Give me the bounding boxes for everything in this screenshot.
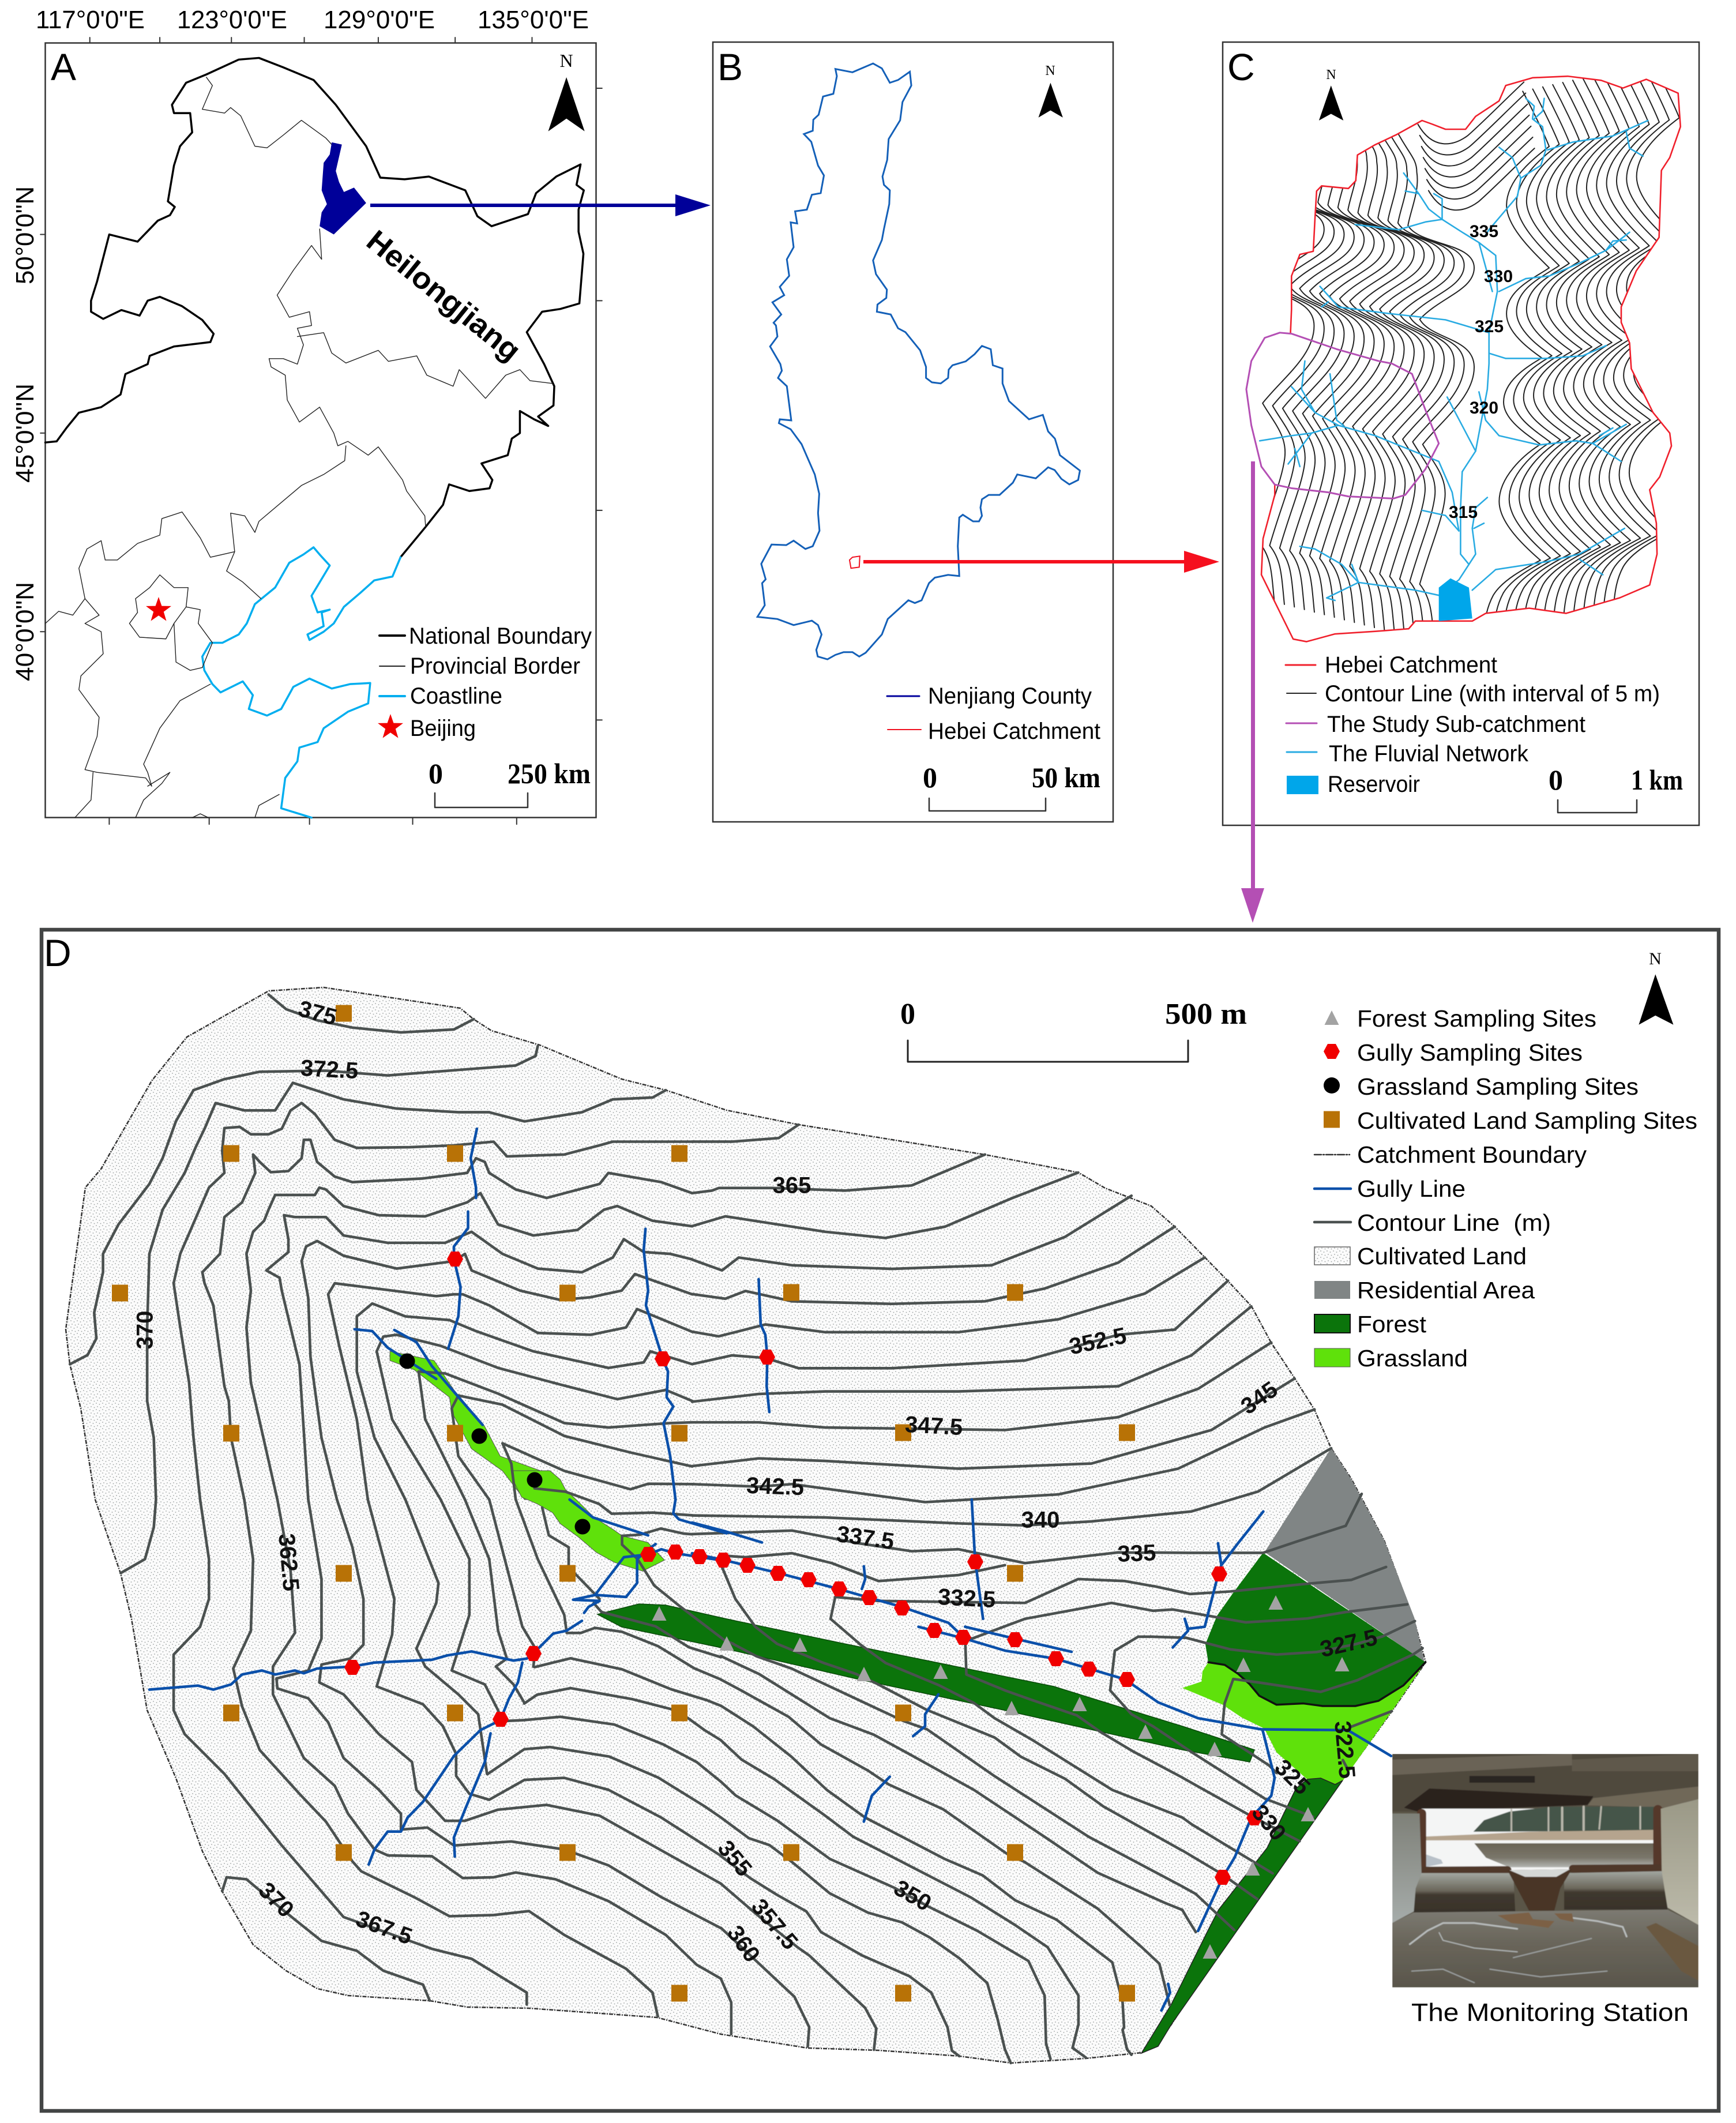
legend D	[1314, 1005, 1697, 1372]
contour labels C: 330	[1484, 267, 1513, 286]
contour labels D: 375	[296, 996, 340, 1031]
legend D: Catchment Boundary	[1357, 1141, 1587, 1168]
legend C: Contour Line (with interval of 5 m)	[1325, 681, 1660, 707]
legend C: Hebei Catchment	[1325, 652, 1497, 678]
photo window frame	[1417, 1813, 1426, 1870]
contour labels D: 360	[722, 1921, 765, 1967]
legend A: National Boundary	[409, 623, 592, 649]
Hebei Catchment location	[850, 556, 860, 568]
contour labels D: 332.5	[937, 1584, 996, 1613]
photo side walls	[1392, 1813, 1422, 1923]
Hebei Catchment boundary	[1261, 76, 1681, 642]
contour labels D: 352.5	[1067, 1323, 1129, 1360]
contour labels C: 335	[1470, 222, 1498, 241]
Nenjiang County outline	[757, 63, 1080, 659]
scale bar A: 0	[429, 757, 443, 790]
contour lines upper right	[692, 1125, 1314, 1502]
cultivated land catchment area	[66, 987, 1426, 2063]
photo water floor	[1392, 1910, 1699, 1987]
contour labels D: 357.5	[746, 1894, 803, 1955]
legend C: The Fluvial Network	[1329, 741, 1529, 766]
legend D: Forest	[1357, 1311, 1427, 1337]
scale bar C: 0	[1549, 764, 1563, 796]
legend D: Grassland Sampling Sites	[1357, 1073, 1639, 1100]
contour labels D: 370	[254, 1877, 299, 1922]
contour lines upper left	[70, 994, 692, 1500]
contour lines lower left	[121, 1500, 721, 2016]
legend A: Coastline	[410, 683, 502, 709]
legend C	[1286, 652, 1660, 797]
scale bar D	[900, 998, 1247, 1062]
legend D: Forest Sampling Sites	[1357, 1005, 1596, 1032]
catchment map C	[1233, 63, 1681, 643]
panel letter C: C	[1227, 46, 1255, 88]
contour labels D: 327.5	[1318, 1625, 1380, 1662]
gully lines lower right	[692, 1500, 1391, 2011]
longitude and latitude tick marks	[40, 37, 602, 824]
coastline	[202, 547, 400, 818]
forest edge strip	[1141, 1778, 1343, 2053]
scale bar B: 0	[923, 761, 937, 794]
grassland sampling sites	[399, 1353, 591, 1534]
contour labels C	[1449, 222, 1513, 522]
legend D: Cultivated Land Sampling Sites	[1357, 1107, 1697, 1134]
cultivated land sampling sites	[112, 1005, 1135, 2001]
contour lines far right	[1153, 1494, 1423, 1932]
legend D: Contour Line (m)	[1357, 1209, 1551, 1236]
panel letter B: B	[717, 46, 743, 88]
contour lines lower centre	[721, 1644, 1182, 2063]
photo opening	[1422, 1809, 1658, 1870]
study sub-catchment boundary	[1246, 333, 1439, 498]
gully sampling sites	[344, 1252, 1262, 1885]
longitude labels: 135°0'0"E	[478, 6, 589, 34]
fluvial network	[1260, 99, 1648, 600]
arrow: B to C	[863, 551, 1219, 573]
legend B: Hebei Catchment	[928, 719, 1100, 744]
gully lines upper	[355, 1129, 675, 1500]
legend A: Beijing	[410, 716, 476, 741]
longitude labels	[36, 6, 589, 34]
contour labels D: 362.5	[273, 1532, 304, 1592]
scale bar A: 250 km	[508, 757, 591, 790]
contour labels D: 365	[773, 1173, 811, 1198]
latitude labels: 40°0'0"N	[11, 582, 39, 681]
contour labels D: 370	[133, 1311, 158, 1349]
residential area	[1265, 1448, 1425, 1662]
Nenjiang County highlight	[320, 142, 366, 235]
legend B	[887, 683, 1100, 744]
provincial borders	[46, 77, 553, 818]
contour labels D: 325	[1270, 1754, 1315, 1799]
scale bar B	[923, 761, 1100, 811]
land cover lower right	[1182, 1553, 1426, 1784]
north arrow C: N	[1326, 67, 1336, 82]
north arrow B	[1039, 63, 1063, 118]
legend A	[378, 623, 592, 741]
gully line upper right	[758, 1279, 769, 1412]
panel C: Hebei Catchment	[1223, 42, 1699, 825]
legend C: Reservoir	[1328, 772, 1420, 797]
map A linework	[46, 58, 584, 818]
forest block	[1205, 1553, 1426, 1706]
latitude labels	[11, 186, 39, 681]
forest strip	[598, 1604, 1254, 1762]
contour labels D: 330	[1247, 1800, 1291, 1846]
north arrow A	[548, 50, 585, 131]
contour lines C	[1233, 63, 1679, 643]
contour labels D: 340	[1021, 1508, 1059, 1533]
north arrow A: N	[559, 50, 573, 71]
latitude labels: 50°0'0"N	[11, 186, 39, 284]
label: Heilongjiang: Heilongjiang	[360, 224, 527, 368]
scale bar C: 1 km	[1631, 764, 1683, 796]
contour labels C: 325	[1475, 317, 1504, 336]
contour labels C: 320	[1470, 399, 1498, 418]
contour labels D: 347.5	[904, 1412, 963, 1440]
contour labels D: 355	[713, 1836, 757, 1881]
scale bar B: 50 km	[1032, 761, 1100, 794]
panel A: regional map	[11, 6, 602, 824]
photo: the monitoring station	[1392, 1754, 1699, 1987]
contour labels D: 335	[1117, 1540, 1156, 1567]
grassland block	[1182, 1662, 1426, 1784]
photo ceiling	[1392, 1754, 1699, 1812]
north arrow D: N	[1649, 949, 1662, 968]
Beijing star	[146, 597, 171, 621]
panel letter D: D	[44, 931, 72, 974]
reservoir	[1439, 578, 1472, 621]
panel B frame	[713, 42, 1113, 822]
contour lines middle right	[692, 1448, 1331, 1727]
contour labels D: 372.5	[300, 1055, 359, 1084]
north arrow B: N	[1045, 63, 1055, 78]
contour labels C: 315	[1449, 503, 1478, 522]
national boundary	[46, 58, 584, 557]
contour labels D: 342.5	[746, 1473, 805, 1500]
forest sampling sites	[652, 1595, 1350, 1959]
contour labels D	[133, 996, 1380, 1967]
contour labels D: 322.5	[1329, 1720, 1360, 1780]
legend D: Grassland	[1357, 1345, 1468, 1372]
panel C frame	[1223, 42, 1699, 825]
contour lines centre	[487, 1489, 733, 1817]
longitude labels: 129°0'0"E	[324, 6, 435, 34]
scale bar A	[429, 757, 591, 807]
photo weir	[1414, 1873, 1515, 1912]
panel A frame	[45, 43, 596, 818]
arrow: C to D	[1241, 461, 1264, 923]
longitude labels: 117°0'0"E	[36, 6, 145, 34]
latitude labels: 45°0'0"N	[11, 384, 39, 483]
legend D: Gully Sampling Sites	[1357, 1039, 1583, 1066]
contour labels D: 350	[889, 1875, 935, 1917]
contour labels D: 345	[1237, 1377, 1283, 1419]
arrow: A to B	[370, 194, 711, 216]
scale bar C	[1549, 764, 1683, 813]
legend D: Residential Area	[1357, 1277, 1535, 1303]
legend D: Cultivated Land	[1357, 1243, 1527, 1269]
forest boundary line	[1208, 1662, 1426, 1706]
legend A: Provincial Border	[410, 653, 580, 679]
north arrow C	[1319, 67, 1343, 121]
panel letter A: A	[51, 46, 76, 88]
contour labels D: 337.5	[835, 1521, 896, 1554]
legend D: Gully Line	[1357, 1175, 1466, 1202]
panel D frame	[42, 930, 1719, 2111]
north arrow D	[1639, 949, 1673, 1025]
panel D: study sub-catchment	[42, 930, 1719, 2111]
longitude labels: 123°0'0"E	[177, 6, 287, 34]
gully lines lower left	[149, 1500, 727, 1865]
scale bar D: 500 m	[1165, 998, 1247, 1031]
upper grassland strip	[390, 1351, 664, 1571]
scale bar D: 0	[900, 998, 915, 1031]
legend C: The Study Sub-catchment	[1327, 712, 1585, 737]
legend B: Nenjiang County	[928, 683, 1092, 709]
panel B: Nenjiang County	[713, 42, 1113, 822]
caption: the monitoring station: The Monitoring Station	[1411, 1998, 1689, 2027]
contour labels D: 367.5	[352, 1906, 415, 1950]
